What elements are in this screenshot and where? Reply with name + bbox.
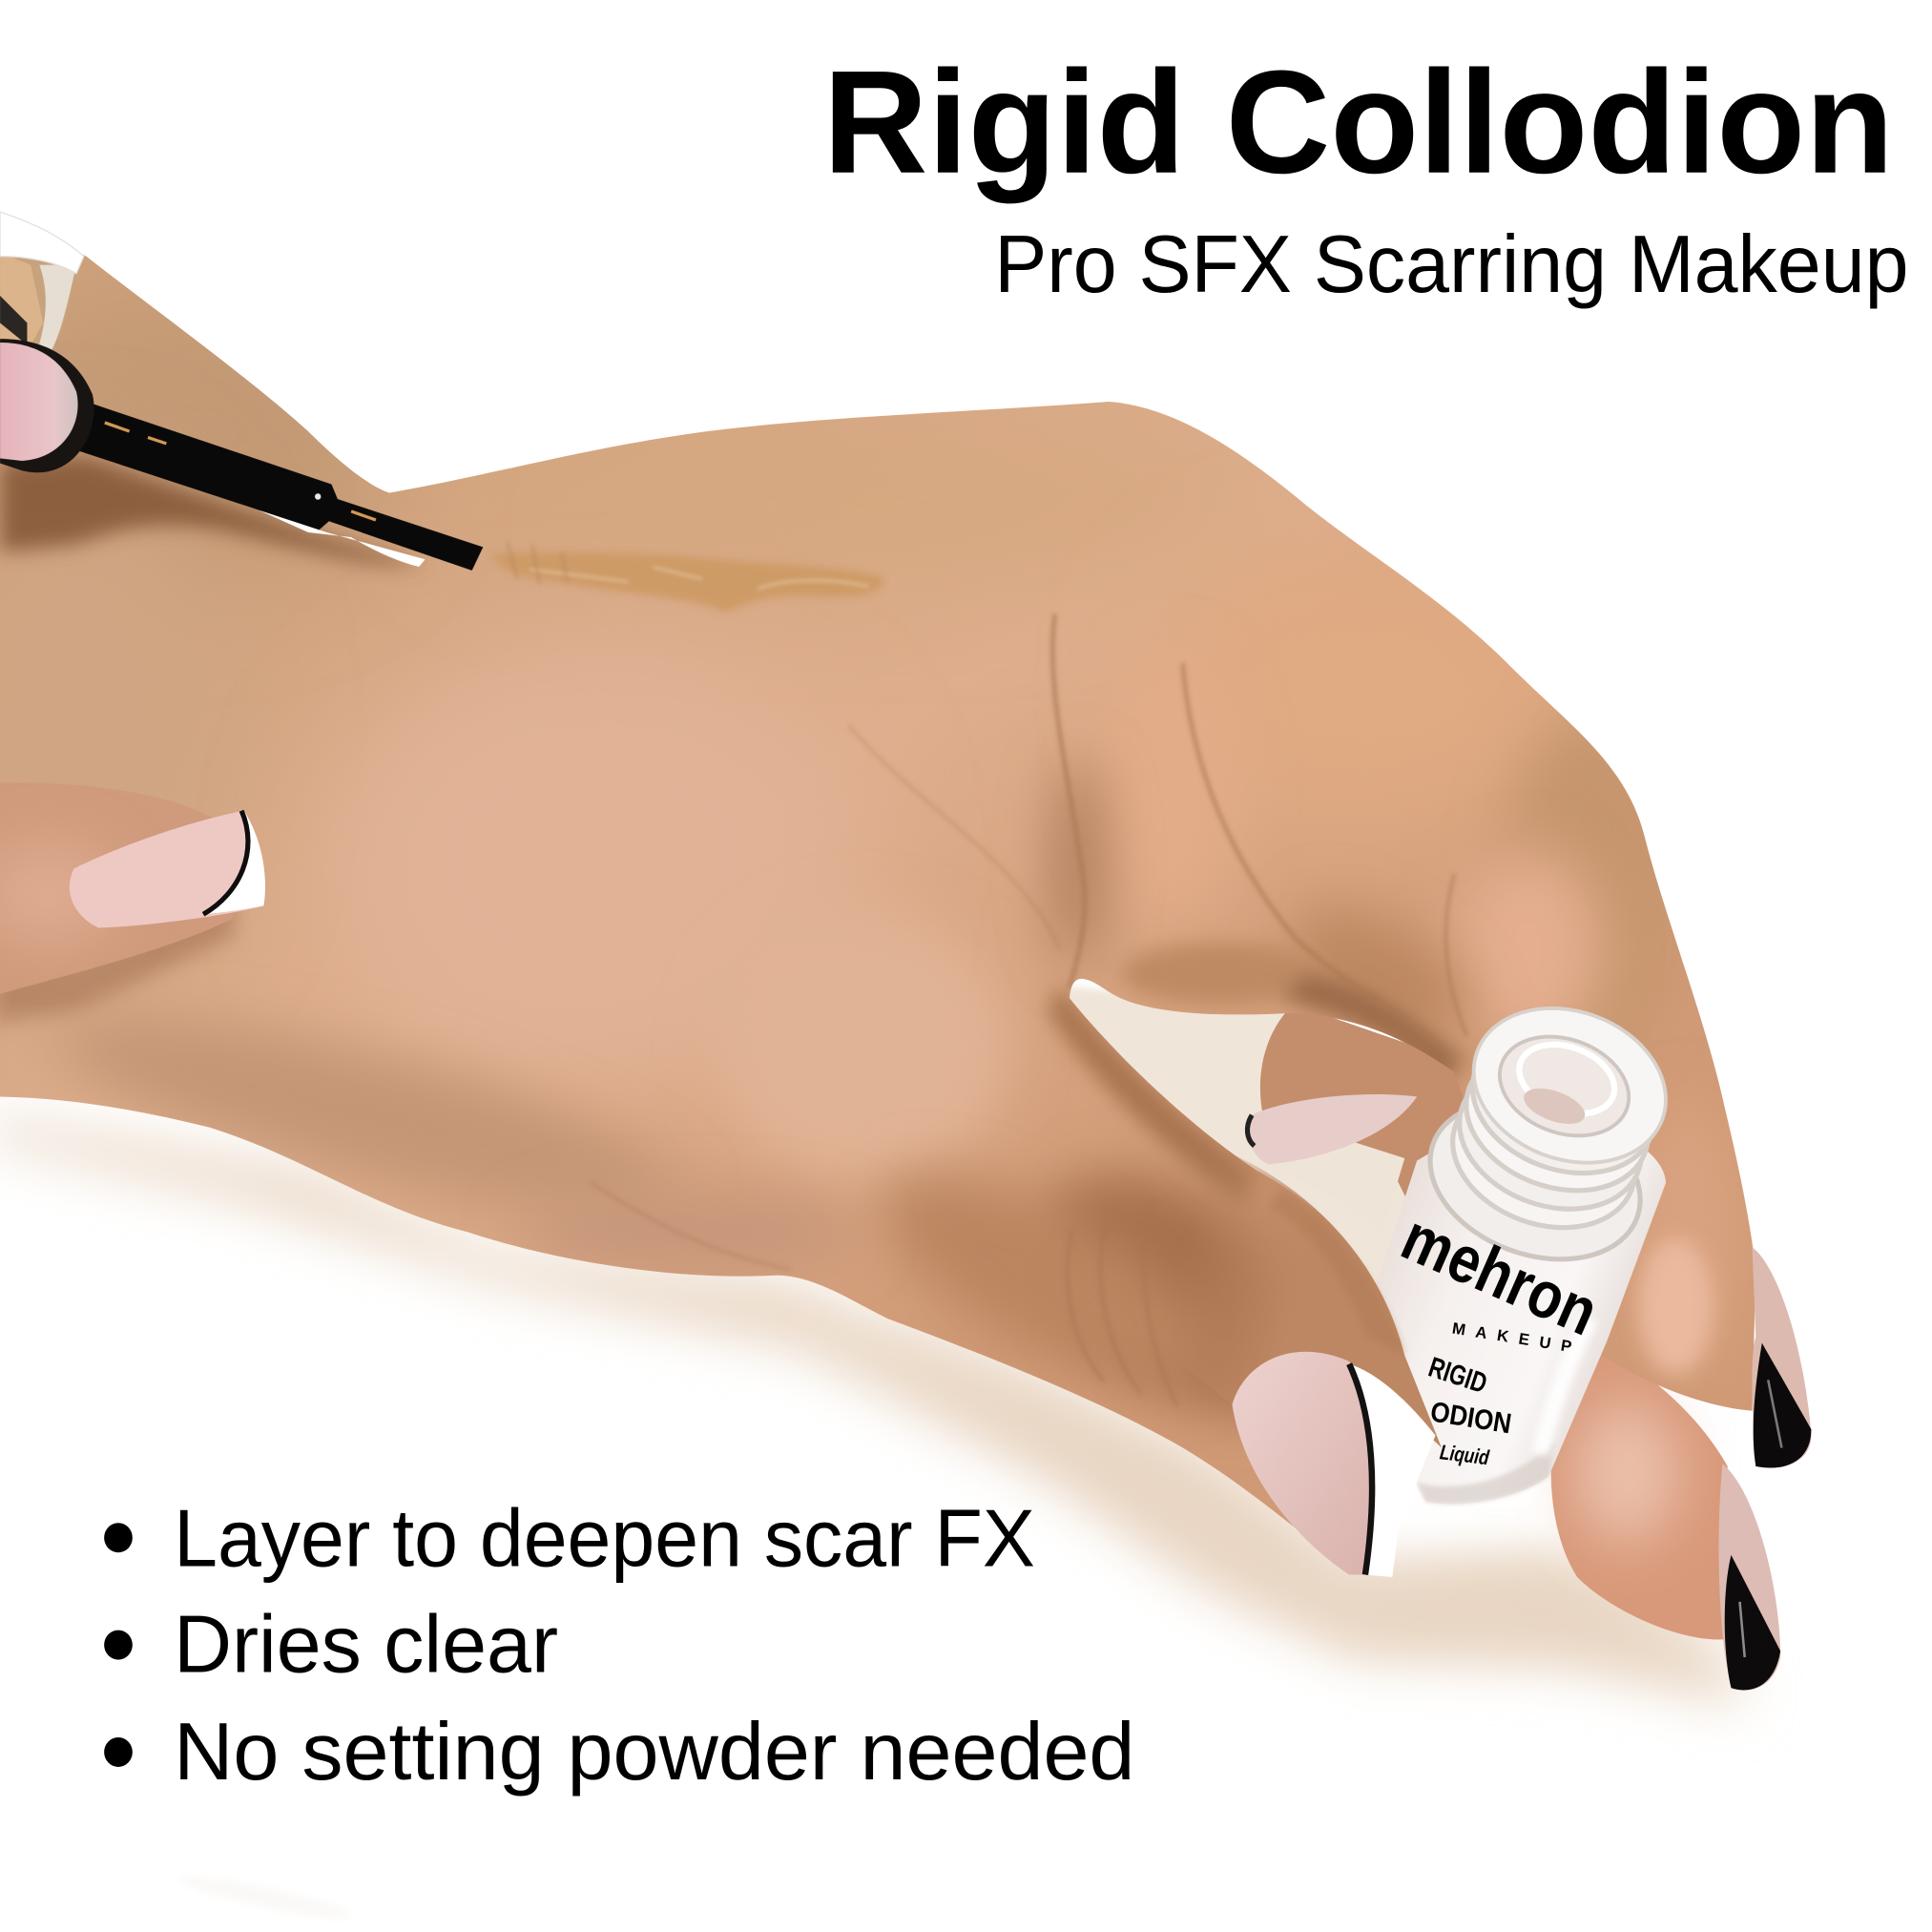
bullet list — [104, 1493, 1134, 1797]
thumb nail with white tip — [1232, 1352, 1436, 1577]
applied collodion scar line — [493, 542, 883, 613]
holding fingers top left — [0, 212, 94, 472]
skin creases — [592, 616, 1466, 1404]
bottle label: mehron: mehron — [1391, 1199, 1609, 1350]
bottle shoulder and neck threads — [1408, 1004, 1688, 1287]
ring finger and nail behind the bottle — [1247, 1005, 1479, 1232]
bullet 2: Dries clear — [174, 1600, 558, 1691]
skin tone shading — [0, 283, 1740, 1462]
title: Rigid Collodion — [823, 40, 1894, 204]
bullet 1: Layer to deepen scar FX — [174, 1493, 1035, 1584]
hand — [0, 210, 1755, 1565]
bottle label: rigid: RIGID — [1424, 1352, 1490, 1400]
bottle label: collodion: ODION — [1428, 1396, 1513, 1440]
subtitle: Pro SFX Scarring Makeup — [994, 219, 1908, 310]
thumb tip over the bottle — [1164, 1146, 1442, 1447]
brush shadow on skin — [0, 456, 426, 565]
cast shadow beneath the hand — [0, 986, 1750, 1925]
bottle label: liquid: Liquid — [1439, 1440, 1491, 1469]
bullet 3: No setting powder needed — [174, 1707, 1134, 1797]
index finger nail with black tip — [1752, 1247, 1811, 1467]
pink nailed finger at left — [0, 782, 265, 1023]
bottle label: makeup: MAKEUP — [1451, 1319, 1573, 1356]
applicator brush — [79, 405, 483, 571]
bottle mouth — [1452, 983, 1688, 1189]
glass bottle — [1377, 979, 1697, 1505]
bottle body — [1377, 1121, 1666, 1505]
middle finger with black tipped nail — [1551, 1331, 1780, 1691]
